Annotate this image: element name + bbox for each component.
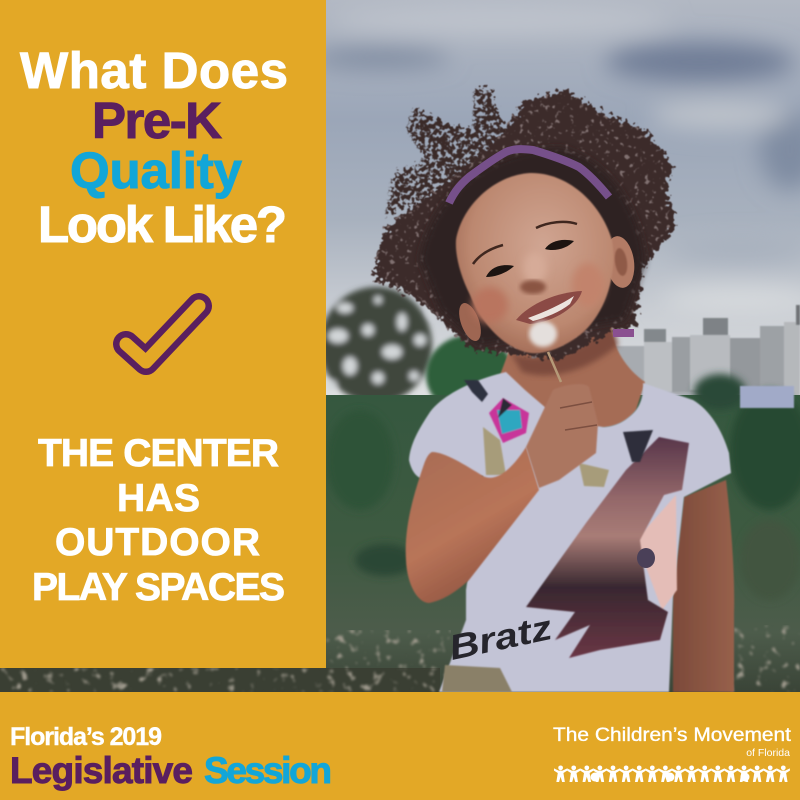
logo: The Children's Movement of Florida — [553, 725, 792, 782]
green tree — [426, 335, 514, 415]
headband — [449, 149, 609, 203]
girl: right arm — [673, 480, 734, 692]
girl: ear left — [455, 300, 485, 344]
title: Pre-K — [92, 92, 222, 149]
strip of flowers below panel — [0, 668, 440, 692]
nose — [520, 280, 546, 294]
shirt print: colourful butterfly — [464, 380, 653, 487]
title: Look Like? — [38, 196, 287, 253]
logo: The Children's Movement of Florida: of Florida — [746, 747, 790, 759]
flower meadow — [326, 630, 451, 692]
mouth — [516, 291, 582, 324]
footer heading: Florida's 2019: Florida’s 2019 — [10, 723, 162, 751]
flower meadow right — [730, 625, 800, 692]
statement text: HAS — [117, 477, 200, 520]
girl: face — [456, 173, 613, 353]
anime eye — [637, 548, 655, 568]
logo: The Children's Movement of Florida: The Children’s Movement — [553, 725, 792, 746]
girl: hair airy wisps — [385, 88, 505, 215]
girl: inner dark hair — [420, 148, 645, 345]
dandelion — [529, 321, 561, 382]
tree behind the girl — [320, 287, 437, 403]
statement text: OUTDOOR — [55, 521, 260, 564]
girl: left arm — [406, 447, 539, 603]
panel: yellow text panel — [0, 0, 326, 668]
title: What Does — [20, 42, 288, 99]
girl: shirt — [409, 372, 731, 692]
headband tail — [613, 329, 634, 337]
girl: hair — [373, 90, 676, 360]
footer band — [0, 692, 800, 800]
icon: paper-doll chain of children — [554, 765, 790, 782]
girl: neck and chest — [500, 315, 645, 428]
photo background: sky — [326, 0, 800, 400]
shirt print: Bratz lettering: Bratz — [446, 608, 556, 668]
icon: purple outlined check mark — [126, 306, 199, 362]
clouds — [310, 4, 800, 312]
eyes and brows — [473, 222, 577, 277]
face shading and cheeks — [472, 252, 604, 323]
footer heading: Session: Session — [204, 750, 332, 791]
anime face — [636, 495, 677, 610]
title: Quality — [70, 142, 243, 199]
buildings — [615, 305, 800, 396]
title — [20, 42, 288, 253]
shirt print: lower detail — [442, 665, 512, 692]
background grass and trees — [326, 395, 800, 692]
white and blue fence pattern — [740, 386, 794, 408]
footer heading: Legislative: Legislative — [10, 750, 193, 791]
statement text: PLAY SPACES — [32, 566, 285, 609]
hand — [526, 384, 598, 488]
girl: ear — [603, 234, 637, 290]
statement text — [32, 432, 285, 609]
shirt print: anime figure — [526, 437, 689, 658]
statement text: THE CENTER — [38, 432, 279, 475]
anime hair — [526, 437, 689, 658]
neck shadow — [510, 325, 618, 376]
